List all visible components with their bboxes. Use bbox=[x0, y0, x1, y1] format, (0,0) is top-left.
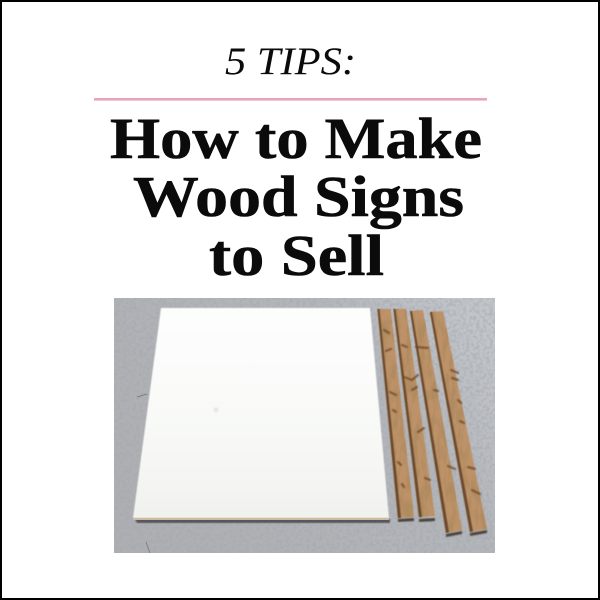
strip 3 bbox=[410, 310, 462, 537]
strip shadowed left edges bbox=[378, 309, 473, 533]
concrete background bbox=[114, 298, 495, 553]
wood knots bbox=[384, 330, 480, 494]
pink divider rule bbox=[94, 98, 487, 101]
title: to Sell bbox=[209, 223, 384, 288]
wood grain texture bbox=[375, 305, 490, 537]
eyebrow: 5 tips: 5 TIPS: bbox=[225, 40, 356, 83]
title: Wood Signs bbox=[133, 164, 464, 229]
photo: white board and wood strips on concrete bbox=[114, 298, 495, 553]
strip 4 bbox=[430, 311, 487, 536]
title bbox=[110, 106, 482, 288]
title: How to Make bbox=[110, 106, 482, 171]
strip 2 bbox=[394, 309, 435, 522]
wood strips bbox=[375, 305, 490, 537]
white board bbox=[133, 308, 390, 523]
strip 1 bbox=[378, 309, 414, 522]
